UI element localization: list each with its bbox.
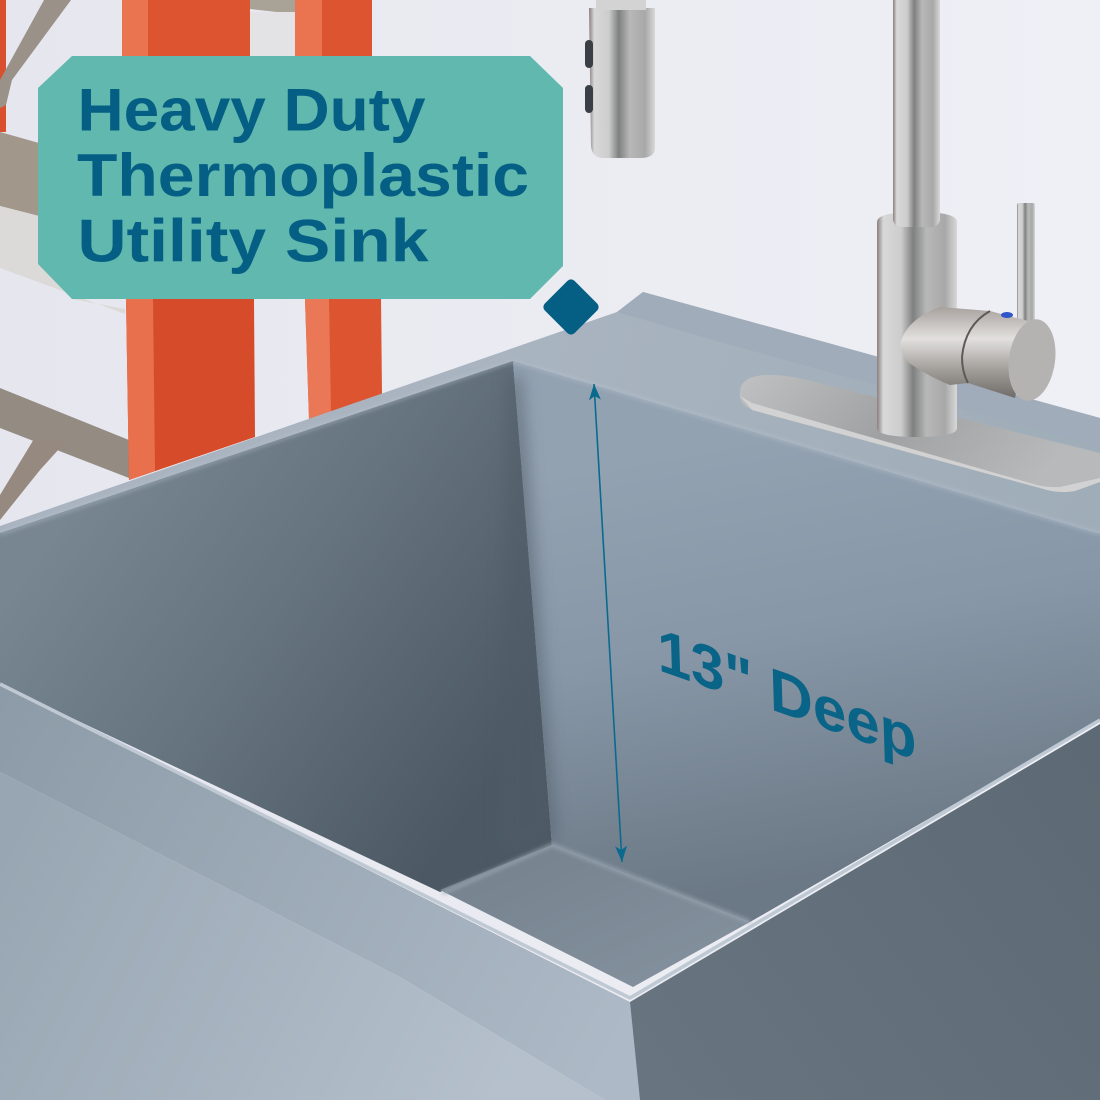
- deck edge highlight: [0, 361, 1100, 534]
- faucet plate: [740, 375, 1100, 492]
- front right rim and face: [630, 724, 1100, 1100]
- diamond marker: [541, 277, 601, 337]
- back ledge: [617, 292, 1100, 447]
- title text: Thermoplastic: [77, 142, 529, 209]
- title text: [77, 76, 529, 274]
- title text: Utility Sink: [78, 208, 429, 274]
- title text: Heavy Duty: [78, 76, 426, 144]
- faucet body: [877, 0, 1060, 437]
- ladder: [0, 0, 382, 520]
- corner shadow: [500, 375, 556, 856]
- sink deck: [0, 292, 1100, 545]
- depth label: 13" Deep: [656, 615, 917, 773]
- basin left wall: [0, 361, 552, 892]
- basin right wall: [513, 361, 1100, 922]
- basin floor: [440, 845, 750, 987]
- depth arrow: [594, 384, 622, 862]
- floor crease: [443, 845, 750, 922]
- title callout: [38, 56, 563, 299]
- front left rim: [0, 684, 642, 1100]
- pull-down spray head: [585, 0, 655, 158]
- rim highlight: [0, 684, 1100, 998]
- plate edge: [740, 396, 1100, 492]
- front left face: [0, 772, 605, 1100]
